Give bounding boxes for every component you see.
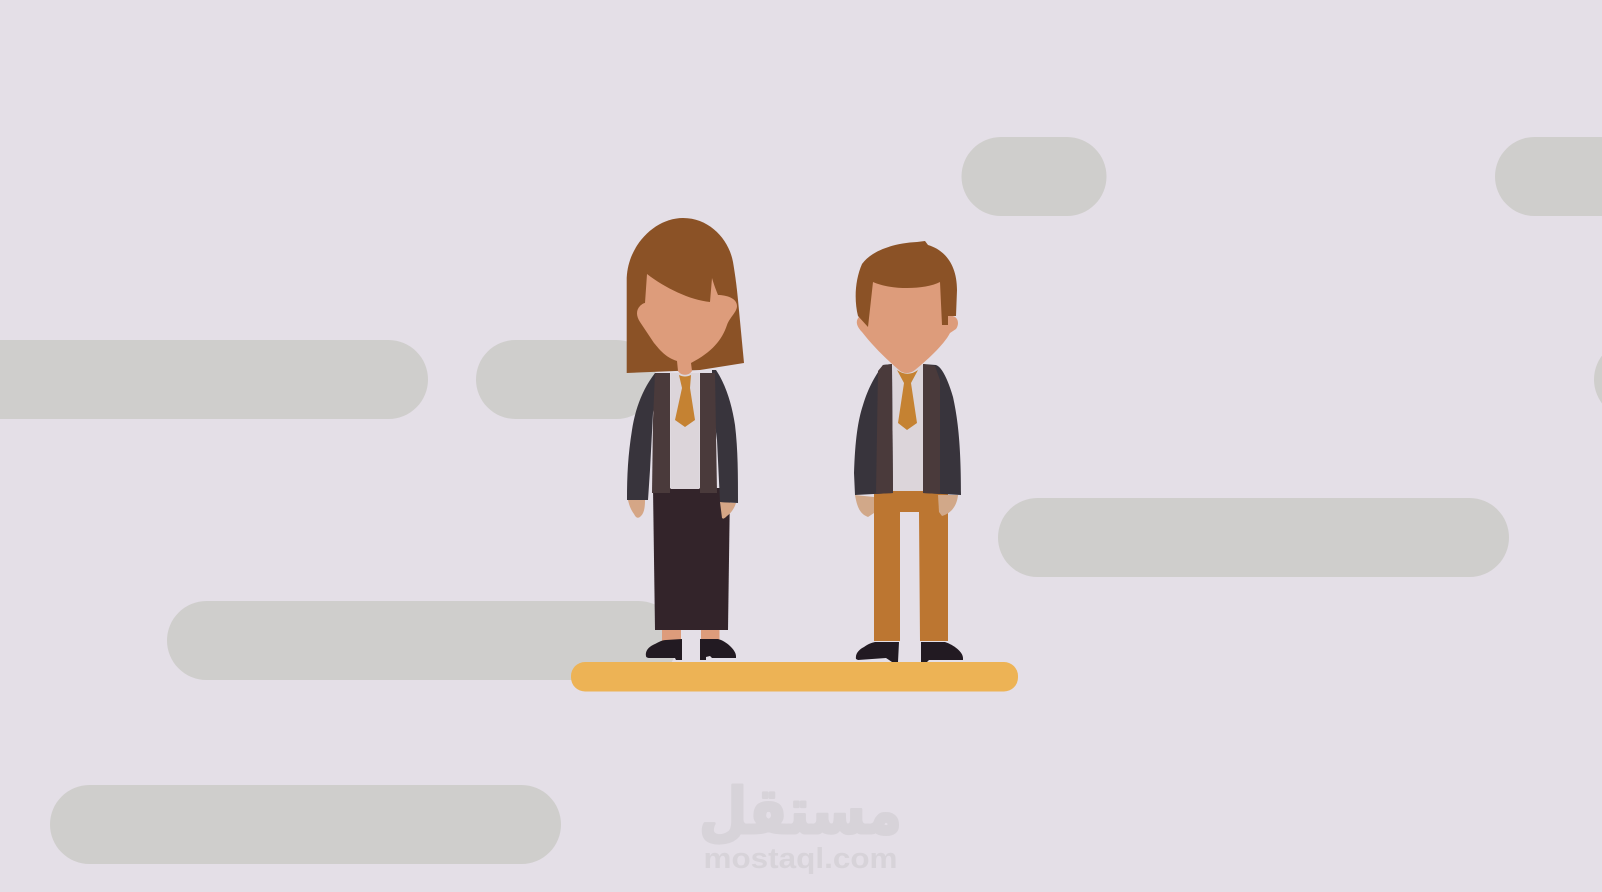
watermark latin wordmark: mostaql.com	[704, 843, 898, 875]
man tie	[897, 370, 918, 430]
woman tie	[675, 375, 695, 427]
woman jacket sleeves	[627, 370, 738, 503]
man shirt	[893, 365, 923, 491]
woman legs	[662, 628, 720, 642]
man hair	[856, 241, 957, 327]
woman shoes	[646, 639, 736, 660]
man lapels	[876, 364, 940, 494]
watermark arabic wordmark: مستقل	[699, 776, 902, 849]
yellow platform	[571, 662, 1018, 692]
woman hair	[627, 218, 744, 373]
woman hands	[628, 500, 736, 519]
man figure	[854, 241, 963, 662]
man jacket	[854, 364, 961, 495]
woman skirt	[653, 488, 730, 630]
woman lapels	[652, 373, 717, 493]
woman figure	[627, 218, 744, 660]
man shoes	[856, 642, 963, 662]
woman shirt	[670, 373, 700, 489]
man trousers	[874, 489, 948, 641]
man face and ears	[857, 280, 958, 373]
woman face	[637, 274, 737, 375]
man hands	[855, 495, 958, 517]
watermark logo	[699, 776, 902, 875]
